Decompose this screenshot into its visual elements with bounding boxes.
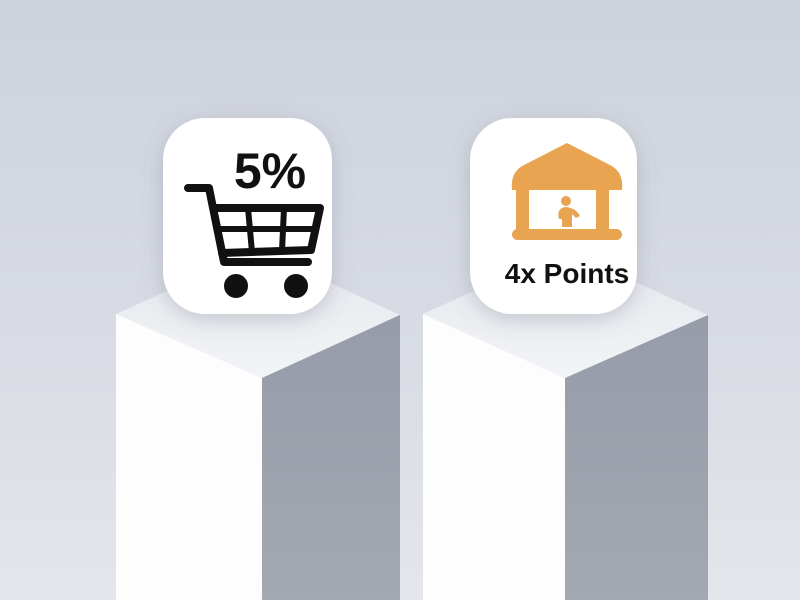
text: 5%: 5% bbox=[234, 143, 306, 199]
text: 4x Points: 4x Points bbox=[505, 258, 629, 289]
card: 4x points bbox=[470, 118, 637, 314]
icon: shopping cart bbox=[188, 188, 320, 294]
pillar: left bbox=[116, 250, 400, 600]
icon: orange pavilion bbox=[512, 143, 622, 240]
pillar: right bbox=[423, 250, 708, 600]
card: 5% cart bbox=[163, 118, 332, 314]
